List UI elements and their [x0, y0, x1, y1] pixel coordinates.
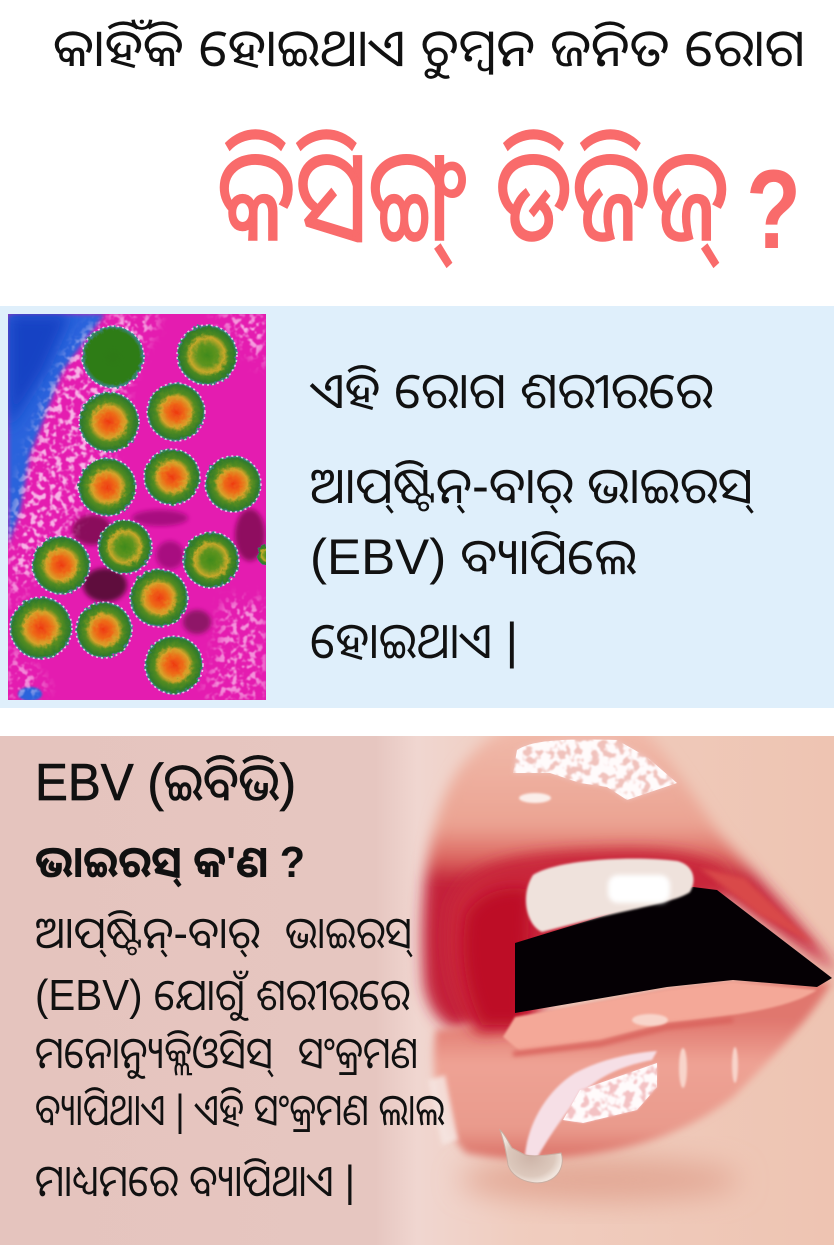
- text: disease description: [309, 363, 754, 669]
- text: EBV explanation: ମାଧ୍ୟମରେ ବ୍ୟାପିଥାଏ |: [35, 1157, 355, 1206]
- open mouth interior: [515, 887, 832, 1013]
- text: disease description: (EBV) ବ୍ୟାପିଲେ: [310, 529, 637, 585]
- mottled membrane texture: [8, 314, 266, 700]
- inner lower lip: [503, 982, 817, 1051]
- lower lip mottled highlight: [563, 1062, 658, 1124]
- lower lip: [434, 982, 832, 1159]
- upper lip highlight: [512, 739, 677, 801]
- text: disease description: ଏହି ରୋଗ ଶରୀରରେ: [309, 363, 713, 419]
- lip corner shade: [700, 868, 815, 945]
- small upper highlight: [519, 793, 551, 803]
- lip seam: [513, 1020, 733, 1054]
- lower left lip gloss: [428, 1075, 458, 1145]
- text: EBV explanation: ବ୍ୟାପିଥାଏ | ଏହି ସଂକ୍ରମଣ ଲାଲ: [35, 1086, 445, 1135]
- text: EBV explanation: ସଂକ୍ରମଣ: [298, 1029, 418, 1078]
- panel: what is EBV: [0, 725, 834, 1245]
- panel: virus explanation: [0, 306, 834, 708]
- lower lip glints: [632, 1014, 738, 1088]
- question mark: ?: [746, 147, 801, 272]
- panel background: [0, 736, 834, 1245]
- text: EBV explanation: [35, 909, 445, 1206]
- image: virus micrograph: [8, 314, 279, 701]
- text: EBV heading: EBV (ଇବିଭି): [35, 754, 296, 812]
- heading: kissing disease: [217, 125, 801, 272]
- text: EBV heading: ଭାଇରସ୍ କ'ଣ ?: [35, 838, 305, 888]
- title: why kissing disease happens: କାହିଁକି ହୋଇଥାଏ ଚୁମ୍ବନ ଜନିତ ରୋଗ: [53, 19, 805, 79]
- virus particles: [10, 325, 279, 694]
- saliva drop: [500, 1130, 562, 1183]
- lower lip streak highlight: [525, 1051, 657, 1158]
- inner red mouth: [447, 849, 732, 1034]
- text: EBV explanation: ମନୋନ୍ୟୁକ୍ଲିଓସିସ୍: [35, 1029, 274, 1079]
- text: disease description: ହୋଇଥାଏ |: [310, 613, 518, 669]
- shadow under lower lip: [460, 1158, 740, 1202]
- text: EBV explanation: ଆପ୍‌ଷ୍ଟିନ୍-ବାର୍: [35, 909, 260, 958]
- text: EBV heading: [35, 754, 305, 888]
- upper lip: [422, 725, 834, 1030]
- heading words: କିସିଙ୍ଗ୍ ଡିଜିଜ୍: [217, 125, 729, 268]
- text: disease description: ଆପ୍‌ଷ୍ଟିନ୍-ବାର୍ ଭାଇରସ୍: [310, 458, 754, 514]
- text: EBV explanation: ଭାଇରସ୍: [285, 909, 413, 958]
- virus spike rims: [10, 325, 261, 694]
- image: lips with saliva drop: [422, 725, 834, 1202]
- text: EBV explanation: (EBV) ଯୋଗୁଁ ଶରୀରରେ: [35, 970, 410, 1021]
- teeth: [526, 859, 694, 932]
- panel background: [0, 306, 834, 708]
